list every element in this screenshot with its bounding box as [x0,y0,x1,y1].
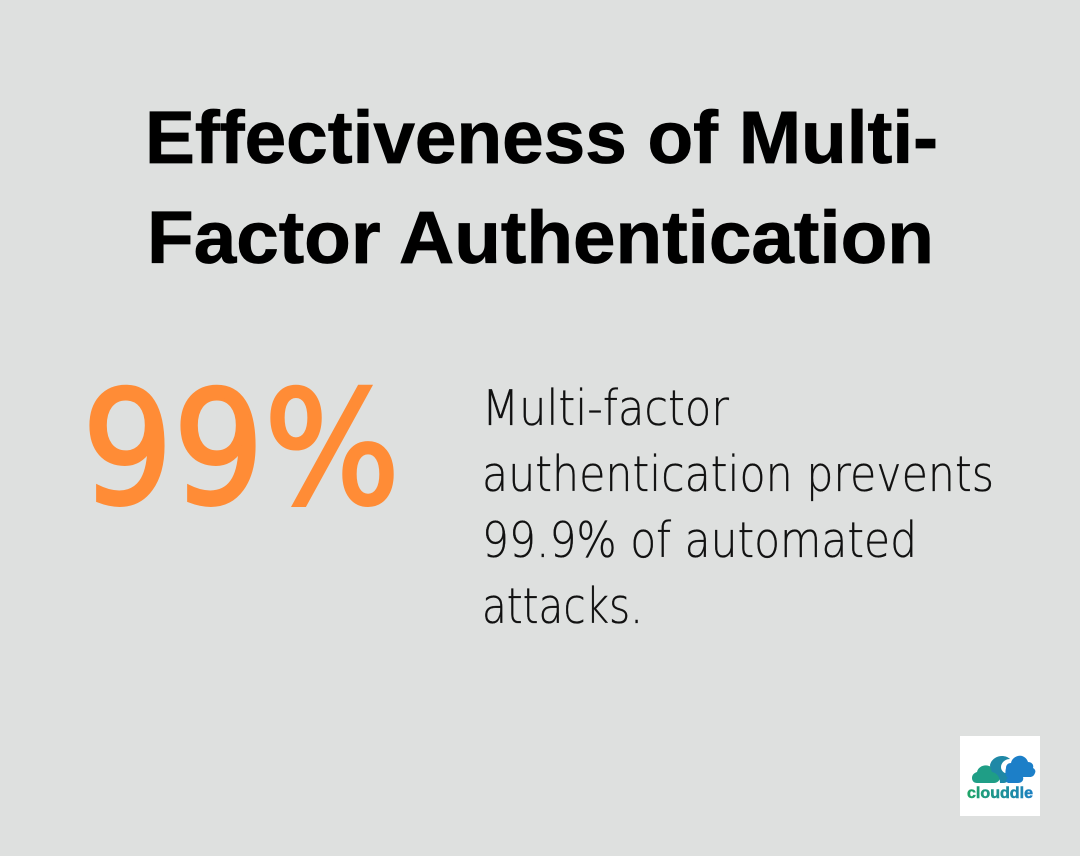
title: Factor Authentication [147,196,934,279]
description text: 99.9% of automated [482,512,917,569]
icon: back cloud [990,756,1010,783]
big statistic: 99%: 99% [82,358,400,541]
description text: authentication prevents [482,446,994,503]
logo wordmark: clouddle [967,785,1033,802]
icon: left cloud [972,765,1000,783]
title [145,96,938,279]
description text: attacks. [482,578,643,635]
icon: right cloud [1005,756,1035,783]
title: Effectiveness of Multi- [145,96,938,179]
description text [482,380,994,635]
description text: Multi-factor [482,380,730,437]
logo: clouddle [960,736,1040,816]
